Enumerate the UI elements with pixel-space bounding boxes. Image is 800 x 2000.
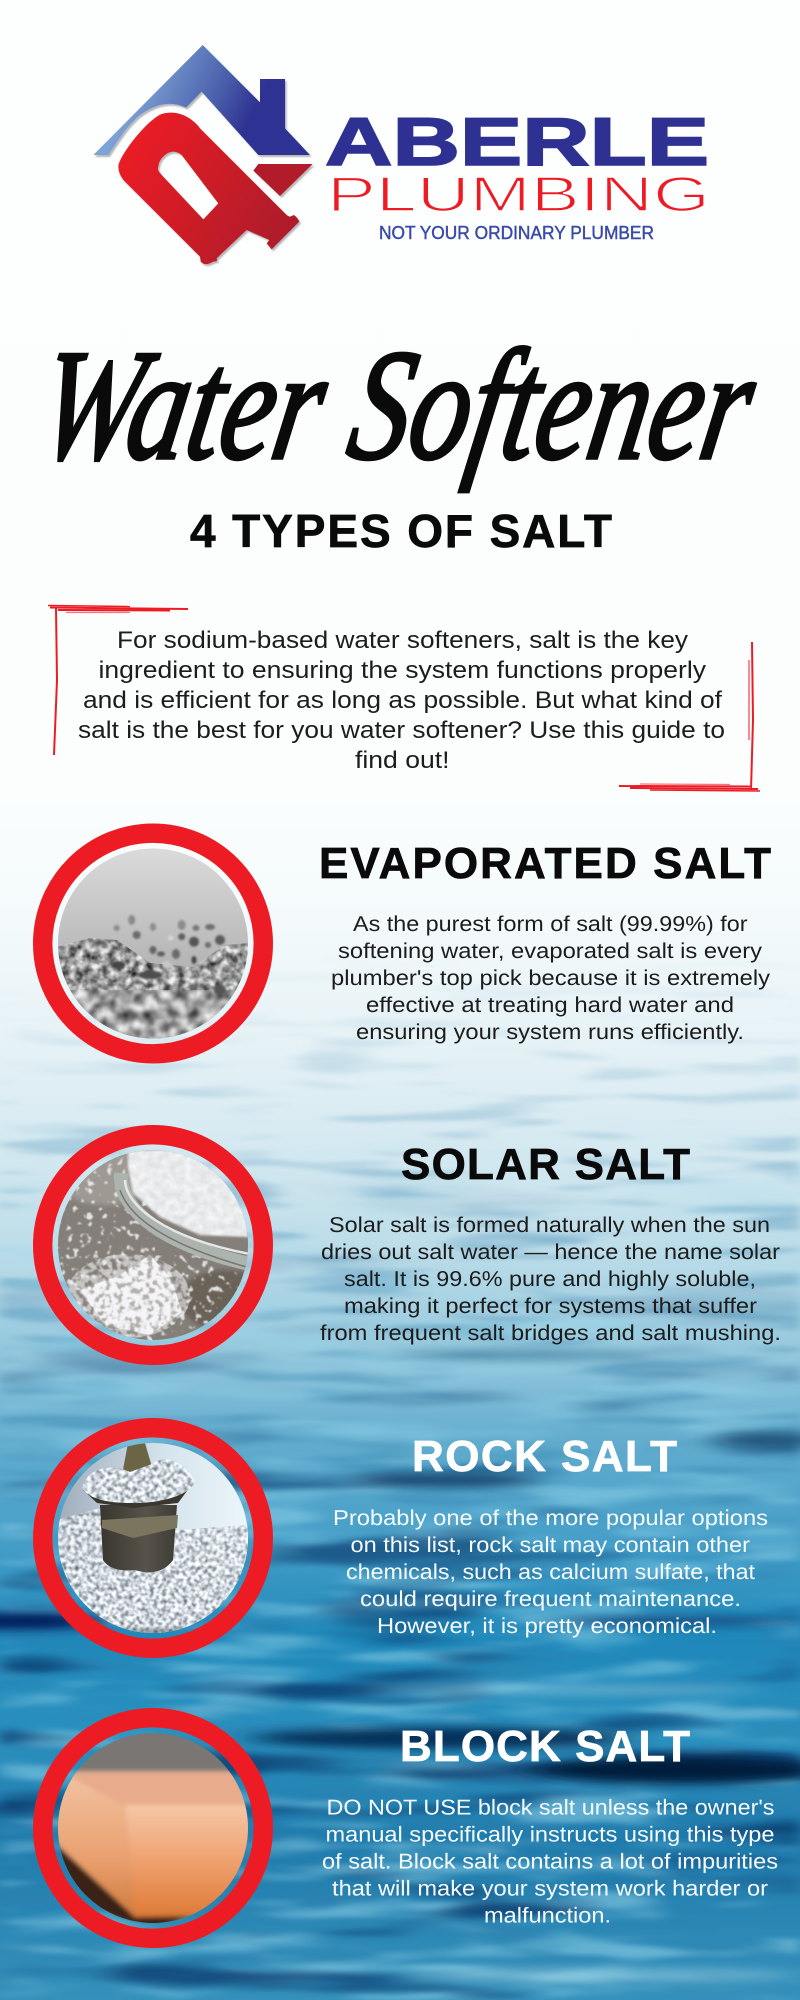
intro text: For sodium-based water softeners, salt is the key [117,627,688,654]
intro text: and is efficient for as long as possible. But what kind of [83,687,722,714]
frame bracket top left [48,606,188,755]
intro text [78,627,725,774]
logo: Aberle Plumbing [93,45,710,264]
heading: EVAPORATED SALT [319,839,771,888]
body text: salt. It is 99.6% pure and highly soluble, [344,1267,756,1291]
body text [331,912,770,1044]
photo: evaporated salt crystals [55,845,251,1042]
water background [0,903,800,2000]
body text [333,1506,768,1638]
body text: Probably one of the more popular options [333,1506,768,1530]
intro text: find out! [355,747,450,774]
body text: plumber's top pick because it is extremely [331,966,770,990]
logo tagline: NOT YOUR ORDINARY PLUMBER [379,223,654,243]
body text: manual specifically instructs using this type [326,1822,774,1846]
body text [320,1213,781,1345]
panel: intro [48,606,760,791]
intro text: salt is the best for you water softener? Use this guide to [78,717,725,744]
section: solar salt [43,1135,781,1355]
photo: rock salt and mortar [55,1440,251,1640]
intro text: ingredient to ensuring the system functions properly [98,657,706,684]
red ring [43,1135,263,1355]
logo wordmark: ABERLE: ABERLE [325,104,709,180]
heading: BLOCK SALT [400,1722,690,1771]
red ring [43,1428,263,1648]
heading: SOLAR SALT [401,1140,690,1189]
subtitle: 4 types of salt: 4 TYPES OF SALT [190,505,612,557]
body text: from frequent salt bridges and salt mushing. [320,1321,781,1345]
body text: effective at treating hard water and [366,993,734,1017]
body text: of salt. Block salt contains a lot of impurities [322,1850,778,1874]
red ring [43,833,263,1054]
section: block salt [43,1718,778,1938]
icon: house roof and pipe [93,45,313,264]
body text: As the purest form of salt (99.99%) for [353,912,748,936]
photo: solar salt flakes and glass bowl [58,1150,248,1340]
body text: that will make your system work harder or [332,1876,768,1900]
section: rock salt [43,1428,768,1648]
body text: Solar salt is formed naturally when the sun [329,1213,770,1237]
red ring [43,1718,263,1938]
frame bracket bottom right [619,642,760,791]
body text: on this list, rock salt may contain other [350,1533,750,1557]
body text: However, it is pretty economical. [377,1614,717,1638]
body text: chemicals, such as calcium sulfate, that [346,1560,755,1584]
body text: ensuring your system runs efficiently. [356,1020,744,1044]
body text: could require frequent maintenance. [360,1587,741,1611]
body text [322,1796,778,1928]
body text: malfunction. [484,1904,611,1928]
section: evaporated salt [43,833,771,1054]
body text: DO NOT USE block salt unless the owner's [326,1796,774,1820]
logo wordmark: PLUMBING: PLUMBING [327,168,710,222]
heading: ROCK SALT [412,1432,677,1481]
body text: softening water, evaporated salt is every [338,939,762,963]
body text: dries out salt water — hence the name solar [321,1240,780,1264]
body text: making it perfect for systems that suffer [344,1294,757,1318]
photo: pink salt block [58,1733,248,1923]
